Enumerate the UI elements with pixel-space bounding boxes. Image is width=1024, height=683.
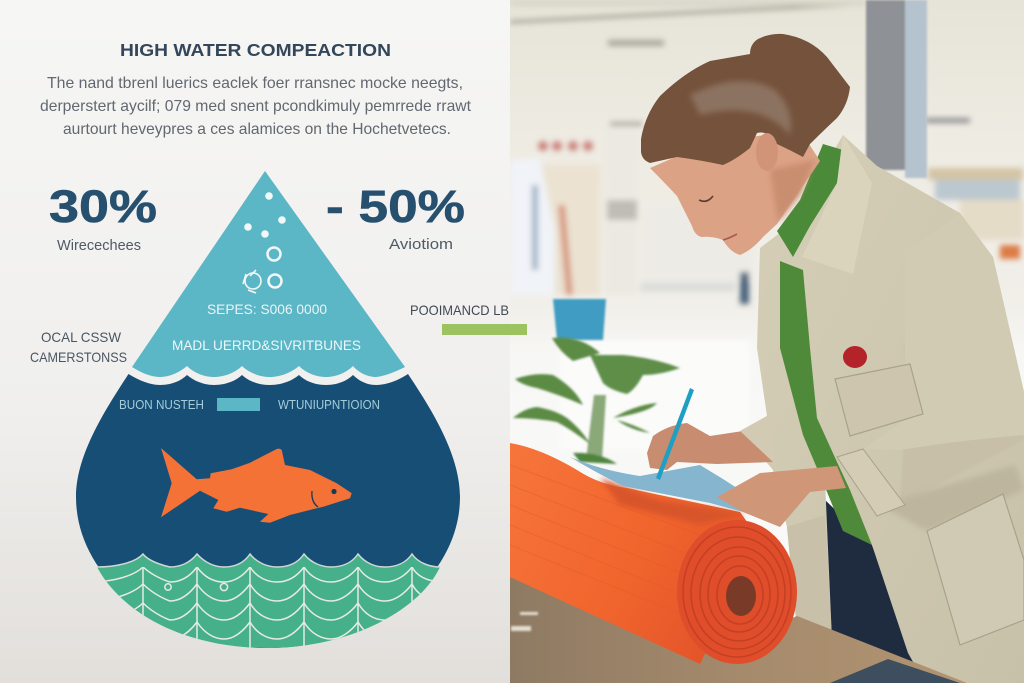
orange mat: rolled end (677, 520, 797, 664)
jacket: cuff (837, 449, 905, 516)
stat: -50%: Aviotiom (389, 236, 453, 253)
orange mat: shadow under map (600, 478, 745, 525)
woman: green collar (777, 144, 843, 257)
green callout bar (442, 324, 527, 335)
photo background: workshop wall and floor (510, 0, 1024, 486)
woman: eye and lips (699, 196, 737, 240)
orange mat: roll body (510, 443, 760, 664)
panel: infographic background (0, 0, 511, 683)
hand holding pen (647, 423, 773, 470)
drop: teal top section (132, 171, 405, 377)
woman: ear (756, 133, 778, 171)
pen (656, 388, 694, 480)
plant (513, 338, 680, 464)
stat: 30% (49, 181, 157, 254)
map sheet (570, 457, 757, 512)
right callout label: POOIMANCD LB (410, 302, 509, 318)
jacket: chest pocket (835, 364, 923, 436)
woman: hair (641, 34, 850, 165)
left callout label: OCAL CSSW (41, 329, 122, 345)
woman: dark trousers (826, 500, 913, 662)
stat: -50% (326, 181, 465, 253)
navy label: wtuni: WTUNIUPNTIOION (278, 397, 380, 412)
panel: photo of woman inspecting orange mat (510, 0, 1024, 683)
icon: recycling symbol (243, 270, 282, 293)
stat: 30%: Wirecechees (57, 237, 141, 254)
teal label: madl: MADL UERRD&SIVRITBUNES (172, 337, 361, 353)
jacket: lower pocket (927, 494, 1024, 645)
woman: jacket (740, 135, 1024, 683)
woman: hair highlight (690, 81, 791, 135)
drop: green net section (89, 554, 445, 650)
navy label: buon: BUON NUSTEH (119, 397, 204, 412)
drop: navy body (76, 374, 460, 648)
intro text block: The nand tbrenl luerics eaclek foer rransnec mocke neegts, (47, 75, 463, 92)
jacket: sleeve (904, 241, 1024, 449)
jacket: sleeve shadow (905, 300, 985, 420)
woman: neck shadow (770, 160, 815, 222)
table (510, 577, 967, 683)
background details (510, 0, 1024, 308)
teal label: seps: SEPES: S006 0000 (207, 301, 327, 317)
stat: 30%: 30% (49, 181, 157, 232)
water drop diagram (76, 171, 460, 650)
background: pillar (866, 0, 927, 178)
intro text block: derperstert aycilf; 079 med snent pcondkimuly pemrrede rrawt (40, 98, 472, 115)
woman: face and neck (650, 130, 820, 255)
jacket: under arm shadow (892, 467, 1022, 530)
title: HIGH WATER COMPEACTION (120, 40, 391, 60)
supporting hand (717, 466, 846, 527)
jacket: left sleeve stub (740, 416, 773, 462)
cutting mat (830, 659, 960, 683)
bubbles (244, 192, 286, 260)
woman: jacket collar (802, 149, 872, 274)
jacket: lower left shadow (787, 516, 832, 628)
intro text block: aurtourt heveypres a ces alamices on the Hochetvetecs. (63, 121, 451, 138)
jacket: badge (843, 346, 867, 368)
intro text block (40, 75, 472, 138)
left callout label: CAMERSTONSS (30, 349, 127, 365)
orange mat: hole (726, 576, 756, 616)
stat: -50%: - 50% (326, 181, 465, 232)
jacket: under sleeve shadow (904, 448, 917, 474)
background: bin (553, 299, 606, 340)
icon: orange fish (161, 448, 352, 523)
table marks (511, 612, 538, 631)
orange mat: ribs (510, 464, 625, 575)
legend swatch (217, 398, 260, 411)
left callout label (30, 329, 127, 365)
woman: green shirt lower (780, 261, 872, 545)
